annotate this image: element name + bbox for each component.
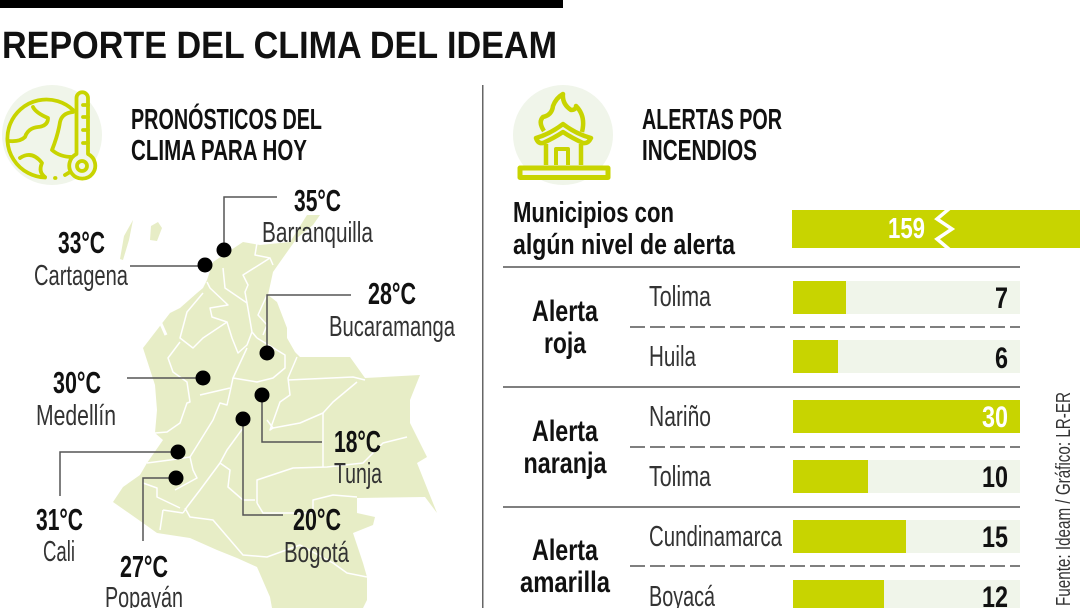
row: Tolima 10: 10: [982, 461, 1008, 494]
label: Bucaramanga: [329, 276, 456, 343]
label: Bogotá: [284, 502, 350, 569]
row: Cundinamarca 15: 15: [982, 521, 1008, 554]
row: Tolima 7: 7: [995, 282, 1008, 315]
label: Cali: Cali: [43, 536, 75, 568]
label: Tunja: [334, 424, 383, 490]
panel: fire alerts: [503, 85, 1080, 608]
group label: Alerta naranja: Alerta: [532, 415, 598, 448]
row rules: [503, 267, 1020, 566]
label: Cartagena: Cartagena: [34, 260, 129, 292]
group label: Alerta amarilla: [520, 534, 610, 599]
label: Cartagena: 33°C: [58, 225, 105, 260]
municipalities label: algún nivel de alerta: [513, 229, 736, 261]
label: Bogotá: Bogotá: [284, 537, 350, 569]
row: Tolima 7: [649, 281, 1020, 315]
row: Boyacá 12: [649, 580, 1020, 608]
heading: forecasts: [131, 102, 322, 167]
row: Tolima 7: Tolima: [649, 281, 712, 313]
label: Medellín: Medellín: [36, 400, 116, 432]
row: Cundinamarca 15: [649, 520, 1020, 554]
group label: Alerta roja: [532, 295, 598, 360]
row: Cundinamarca 15: Cundinamarca: [649, 521, 783, 553]
label: Tunja: Tunja: [334, 458, 383, 490]
source credit: Fuente: Ideam / Gráfico: LR-ER: [1053, 392, 1075, 606]
label: Barranquilla: 35°C: [294, 183, 341, 218]
label: Bucaramanga: 28°C: [368, 276, 416, 311]
label: Medellín: [36, 365, 116, 432]
map leader lines: [60, 197, 351, 541]
heading: fire alerts: ALERTAS POR: [642, 104, 782, 136]
heading: forecasts: PRONÓSTICOS DEL: [131, 102, 322, 136]
heading: forecasts: CLIMA PARA HOY: [131, 135, 307, 167]
icon: house on fire: [513, 85, 613, 185]
row: Tolima 10: [649, 460, 1020, 494]
group label: Alerta roja: roja: [544, 327, 586, 360]
label: Cali: 31°C: [36, 502, 83, 537]
title: REPORTE DEL CLIMA DEL IDEAM: [2, 25, 557, 67]
row: Huila 6: Huila: [649, 341, 697, 373]
label: Tunja: 18°C: [334, 424, 381, 459]
label: Popayán: 27°C: [120, 549, 168, 584]
row: Huila 6: [649, 340, 1020, 375]
label: Medellín: 30°C: [53, 365, 101, 400]
row: Nariño 30: [649, 400, 1020, 434]
group label: Alerta naranja: [524, 415, 607, 480]
row: Nariño 30: Nariño: [649, 401, 711, 433]
panel: forecasts: [2, 85, 456, 608]
column divider: [482, 85, 484, 608]
municipalities label: Municipios con: [513, 197, 674, 229]
group label: Alerta roja: Alerta: [532, 295, 598, 328]
label: Cali: [36, 502, 83, 568]
heading: fire alerts: INCENDIOS: [642, 135, 757, 167]
row: Tolima 10: Tolima: [649, 461, 712, 493]
icon: globe with thermometer: [2, 85, 102, 185]
label: Popayán: [105, 549, 183, 608]
city dots: [168, 242, 274, 486]
heading: fire alerts: [642, 104, 782, 167]
top black bar: [0, 0, 563, 8]
label: Barranquilla: Barranquilla: [262, 217, 374, 249]
total bar: 159: 159: [888, 213, 925, 245]
label: Cartagena: [34, 225, 129, 292]
group label: Alerta naranja: naranja: [524, 447, 607, 480]
label: Bogotá: 20°C: [293, 502, 341, 537]
label: Barranquilla: [262, 183, 374, 249]
map of Colombia: [113, 215, 437, 608]
group label: Alerta amarilla: amarilla: [520, 566, 610, 599]
total bar: 159: [792, 208, 1080, 250]
group label: Alerta amarilla: Alerta: [532, 534, 598, 567]
municipalities label: [513, 197, 736, 261]
row: Nariño 30: 30: [982, 401, 1008, 434]
label: Bucaramanga: Bucaramanga: [329, 311, 456, 343]
row: Huila 6: 6: [995, 342, 1008, 375]
